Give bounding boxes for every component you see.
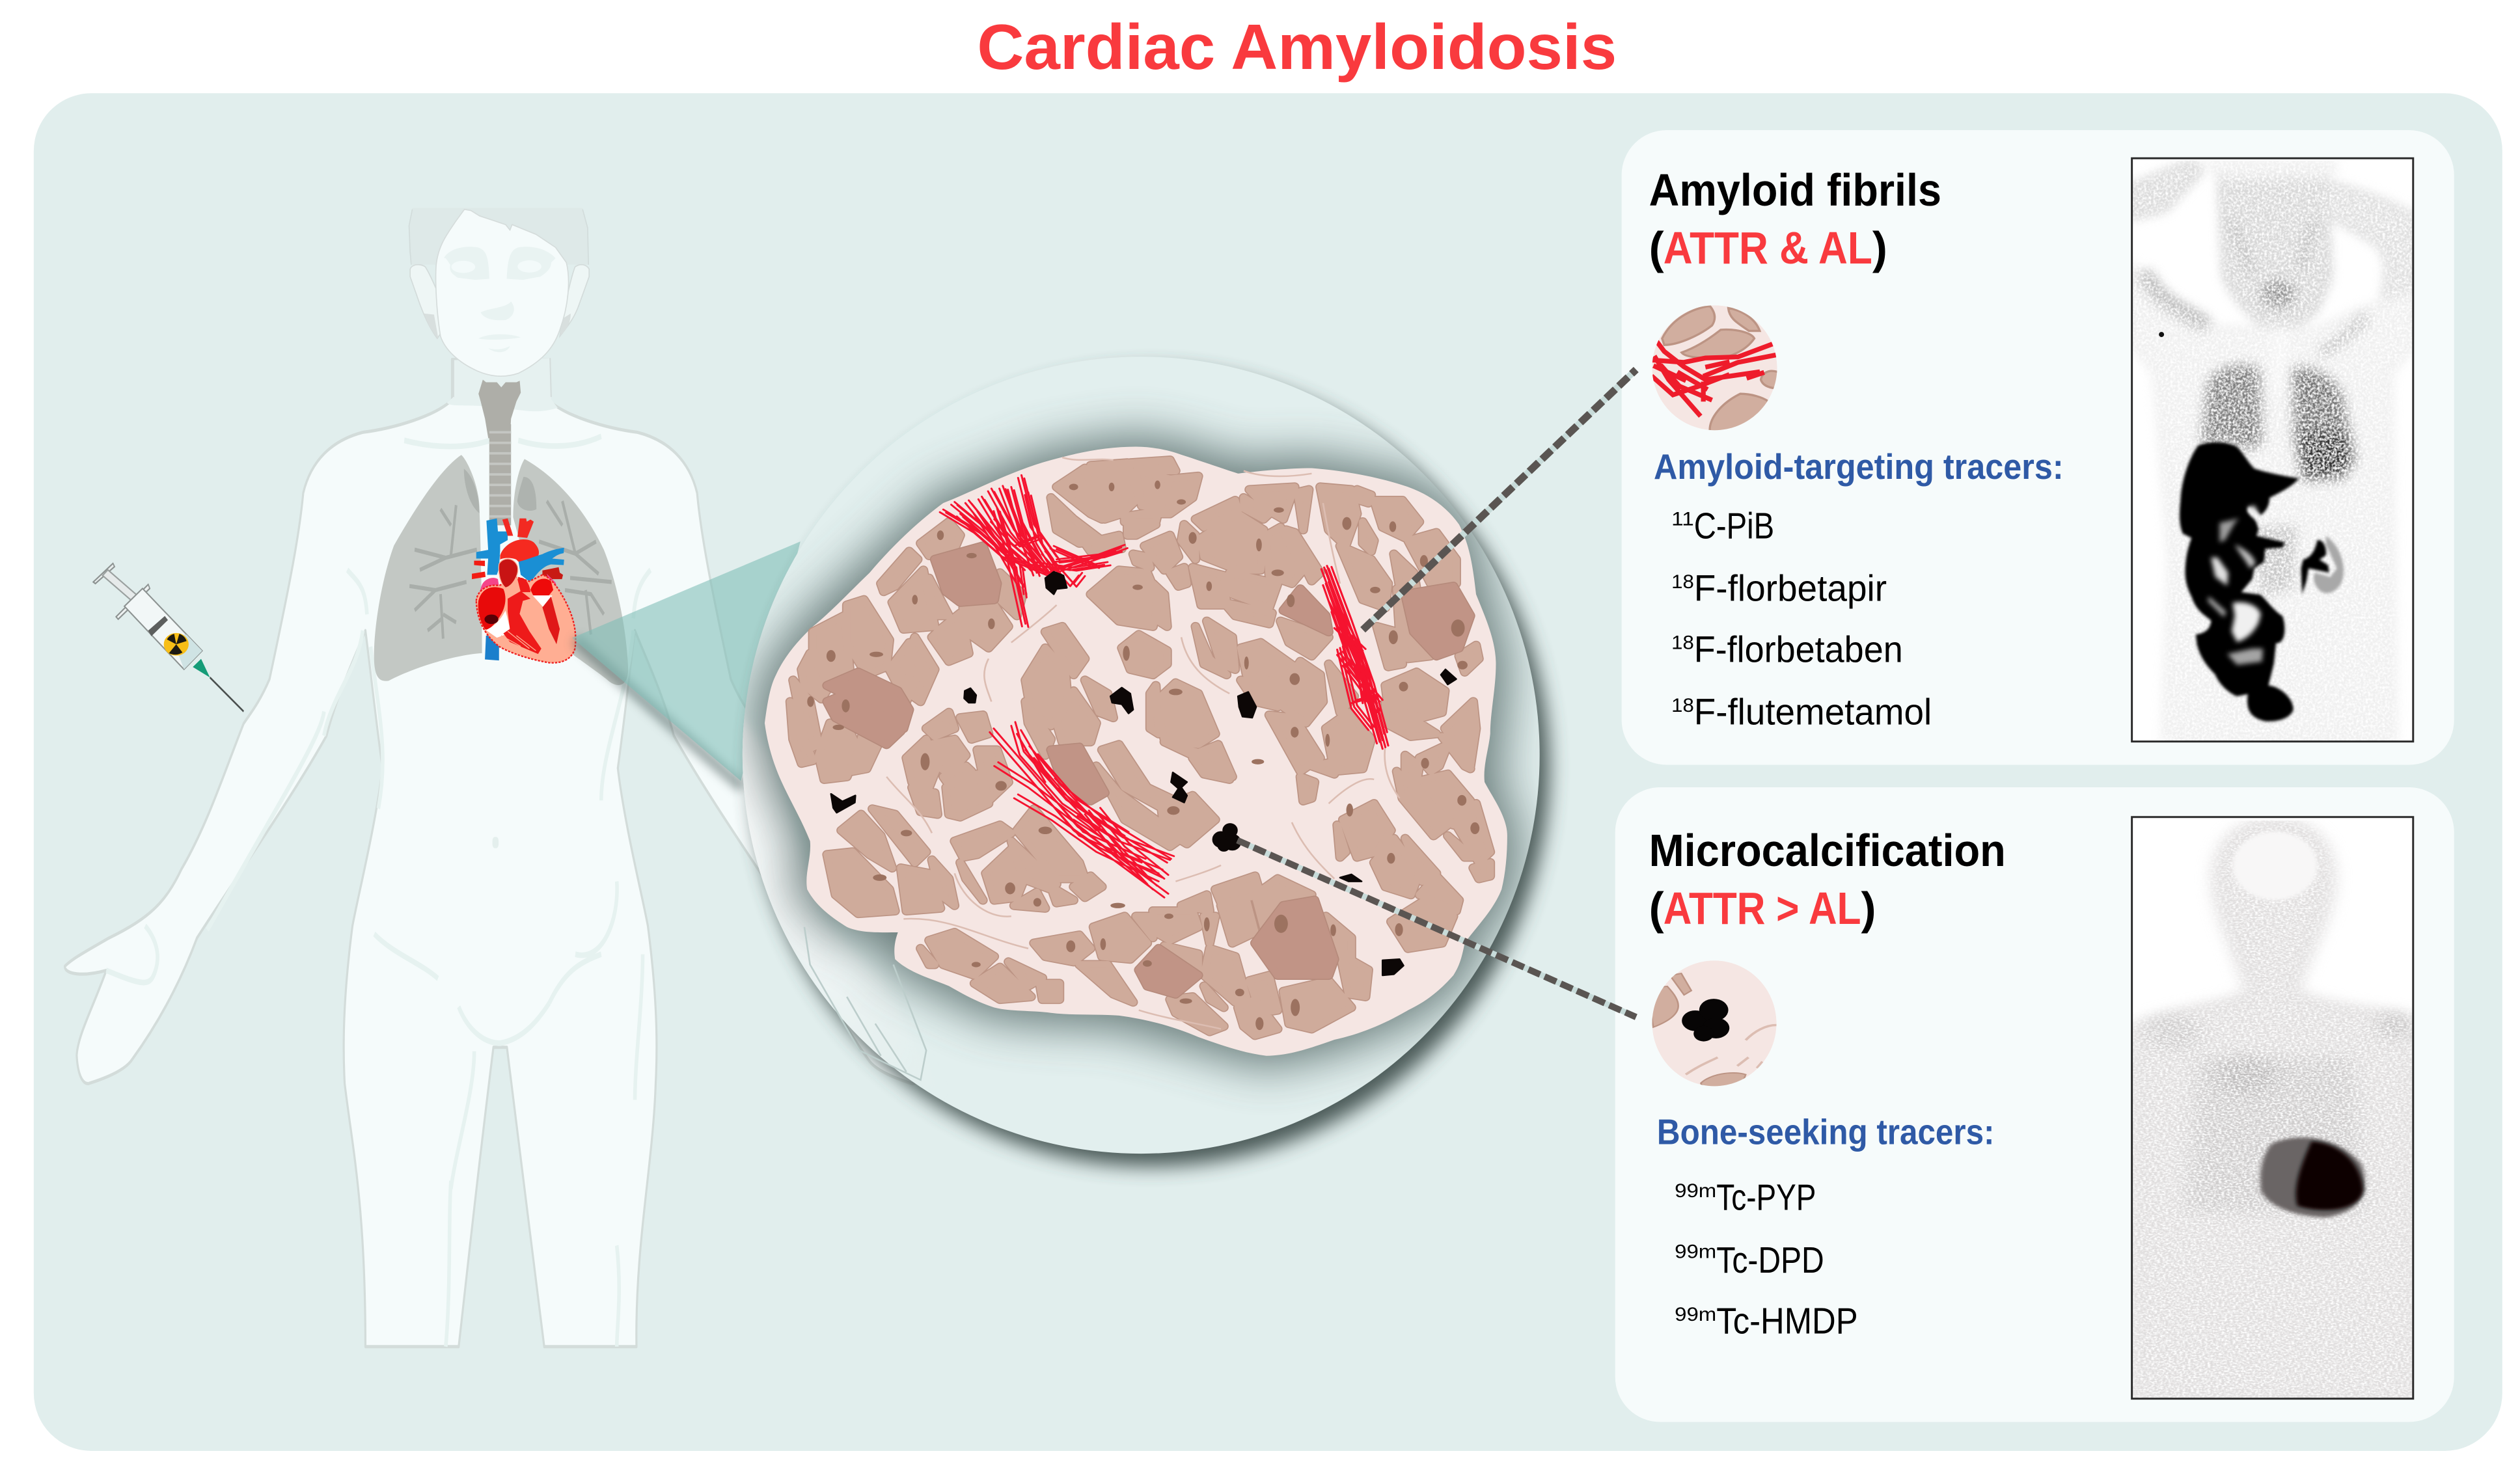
lens drop shadow (752, 370, 1549, 1167)
tracer list: 11 (1671, 509, 1694, 530)
scan: bone scintigraphy whole body image (2131, 817, 2415, 1401)
tracer list: 18 (1671, 695, 1694, 716)
tracer list (1675, 1178, 1858, 1342)
hair (409, 208, 588, 265)
heart (472, 519, 575, 663)
title: Cardiac Amyloidosis (977, 11, 1617, 83)
inset: microcalcification circle (1648, 960, 1777, 1090)
lens disc (743, 357, 1540, 1154)
tracer list: Tc-HMDP (1716, 1301, 1858, 1342)
tracer list: 99m (1675, 1304, 1716, 1325)
cell nuclei (807, 481, 1479, 1030)
tracer list: F-flutemetamol (1694, 692, 1932, 733)
tracer list: 18 (1671, 571, 1694, 593)
hand outline (804, 927, 926, 1080)
heart uptake (2260, 1137, 2364, 1217)
subheading: ATTR greater than AL: ATTR > AL (1664, 883, 1861, 934)
body silhouette (65, 359, 935, 1347)
face (436, 210, 569, 376)
panel: amyloid fibrils (1622, 130, 2454, 765)
inset: amyloid fibril circle (1652, 305, 1778, 433)
trachea (489, 424, 511, 525)
tracer list: F-florbetapir (1694, 569, 1887, 610)
neck (447, 358, 558, 411)
amyloid fibril bundle upper left (940, 475, 1127, 627)
tracer list: 99m (1675, 1241, 1716, 1263)
subheading: ATTR and AL: ) (1872, 223, 1887, 273)
scan: amyloid PET whole body image (2128, 157, 2417, 743)
tissue group (765, 447, 1507, 1080)
calcification deposits (831, 572, 1457, 975)
head (409, 208, 589, 439)
facial features (444, 247, 556, 352)
tissue section (765, 447, 1507, 1056)
dashed connector to microcalcification (1237, 841, 1636, 1017)
magnification cone (572, 541, 801, 787)
great vessels (476, 519, 508, 575)
heart chambers (499, 559, 518, 588)
tracer list: Tc-PYP (1716, 1178, 1816, 1219)
amyloid fibril bundle upper right (1321, 566, 1388, 749)
tracer list: 99m (1675, 1180, 1716, 1202)
left lung (374, 455, 482, 681)
heart outer wall (476, 575, 575, 663)
panel: microcalcification (1615, 787, 2454, 1422)
heading: microcalcification: Microcalcification (1649, 825, 2006, 876)
dark organs (2180, 442, 2329, 722)
subheading: ATTR greater than AL: ) (1861, 883, 1876, 934)
right lung (513, 459, 628, 685)
tracer list: Tc-DPD (1716, 1240, 1824, 1281)
label: bone-seeking tracers: Bone-seeking tracers: (1657, 1112, 1995, 1152)
subheading: ATTR and AL: ( (1649, 223, 1664, 273)
amyloid fibril bundle lower (990, 722, 1174, 897)
heading: amyloid fibrils: Amyloid fibrils (1649, 165, 1941, 215)
connective tissue strands (886, 457, 1399, 1029)
larynx (478, 380, 521, 439)
tracer list (1671, 506, 1932, 733)
tracer list: F-florbetaben (1694, 629, 1903, 670)
bowel light streaks (2208, 506, 2263, 665)
muscle fibre cells (790, 460, 1490, 1035)
brain (2232, 832, 2318, 900)
tracer list: C-PiB (1694, 506, 1774, 547)
kidney cortex (2314, 535, 2344, 593)
body shading (106, 437, 650, 1347)
subheading: ATTR greater than AL: ( (1649, 883, 1664, 934)
magnified tissue lens (723, 357, 1549, 1167)
label: amyloid-targeting tracers: Amyloid-targeting tracers: (1654, 447, 2064, 487)
arm seen through lens (742, 719, 899, 1072)
dashed connector to amyloid fibrils (1363, 370, 1636, 630)
liver, bowel, bladder and kidney uptake (2180, 442, 2344, 722)
upper body haze (2128, 161, 2417, 743)
subheading: ATTR and AL: ATTR & AL (1664, 223, 1872, 273)
ears (410, 265, 442, 338)
tissue drop shadow (765, 447, 1507, 1056)
human body figure (65, 359, 935, 1347)
navel (493, 837, 499, 848)
icon: syringe with radioactive tracer (93, 563, 243, 711)
tracer list: 18 (1671, 632, 1694, 654)
